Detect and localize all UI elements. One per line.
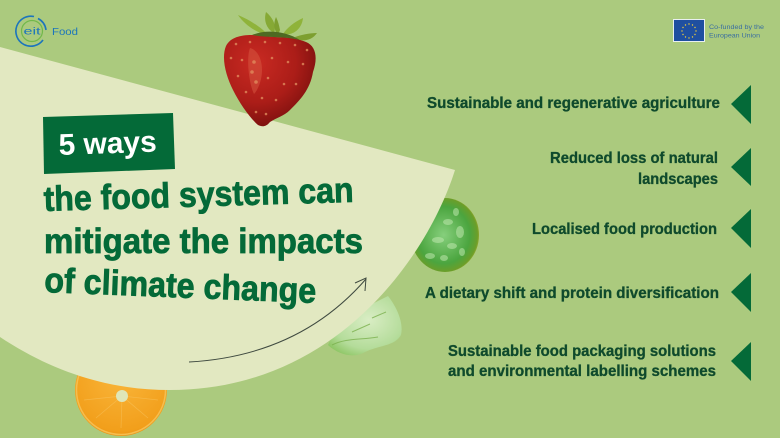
list item 5: and environmental labelling schemes xyxy=(448,363,716,380)
heading: title xyxy=(43,171,363,311)
list item 1 xyxy=(427,85,751,124)
list item 5 xyxy=(448,342,751,381)
list item 2: Reduced loss of natural xyxy=(550,150,718,167)
heading: title: mitigate the impacts xyxy=(44,222,363,261)
logo: EIT Food: eit xyxy=(24,26,41,38)
logo: EU co-funded: Co-funded by the xyxy=(709,24,764,31)
heading: title: the food system can xyxy=(43,171,354,219)
icon: brussels sprout xyxy=(411,198,479,272)
panel: 5 ways badge xyxy=(43,113,175,174)
badge text: 5 ways xyxy=(58,126,157,162)
icon: strawberry xyxy=(224,12,317,126)
list item 3 xyxy=(532,209,751,248)
logo: EU co-funded xyxy=(674,20,764,42)
logo: EU co-funded: European Union xyxy=(709,32,760,40)
list item 1: Sustainable and regenerative agriculture xyxy=(427,95,720,112)
list item 2: landscapes xyxy=(638,171,718,188)
heading: title: of climate change xyxy=(44,261,317,311)
list item 3: Localised food production xyxy=(532,221,717,238)
list item 2 xyxy=(550,148,751,188)
list item 4: A dietary shift and protein diversification xyxy=(425,285,719,302)
panel: cream curved shape xyxy=(0,47,455,390)
list item 5: Sustainable food packaging solutions xyxy=(448,343,716,360)
icon: cabbage leaf xyxy=(328,296,402,355)
logo: EIT Food xyxy=(16,16,78,46)
icon: orange slice xyxy=(75,344,167,436)
logo: EIT Food: Food xyxy=(52,27,78,38)
arrow xyxy=(189,278,366,362)
list item 4 xyxy=(425,273,751,312)
